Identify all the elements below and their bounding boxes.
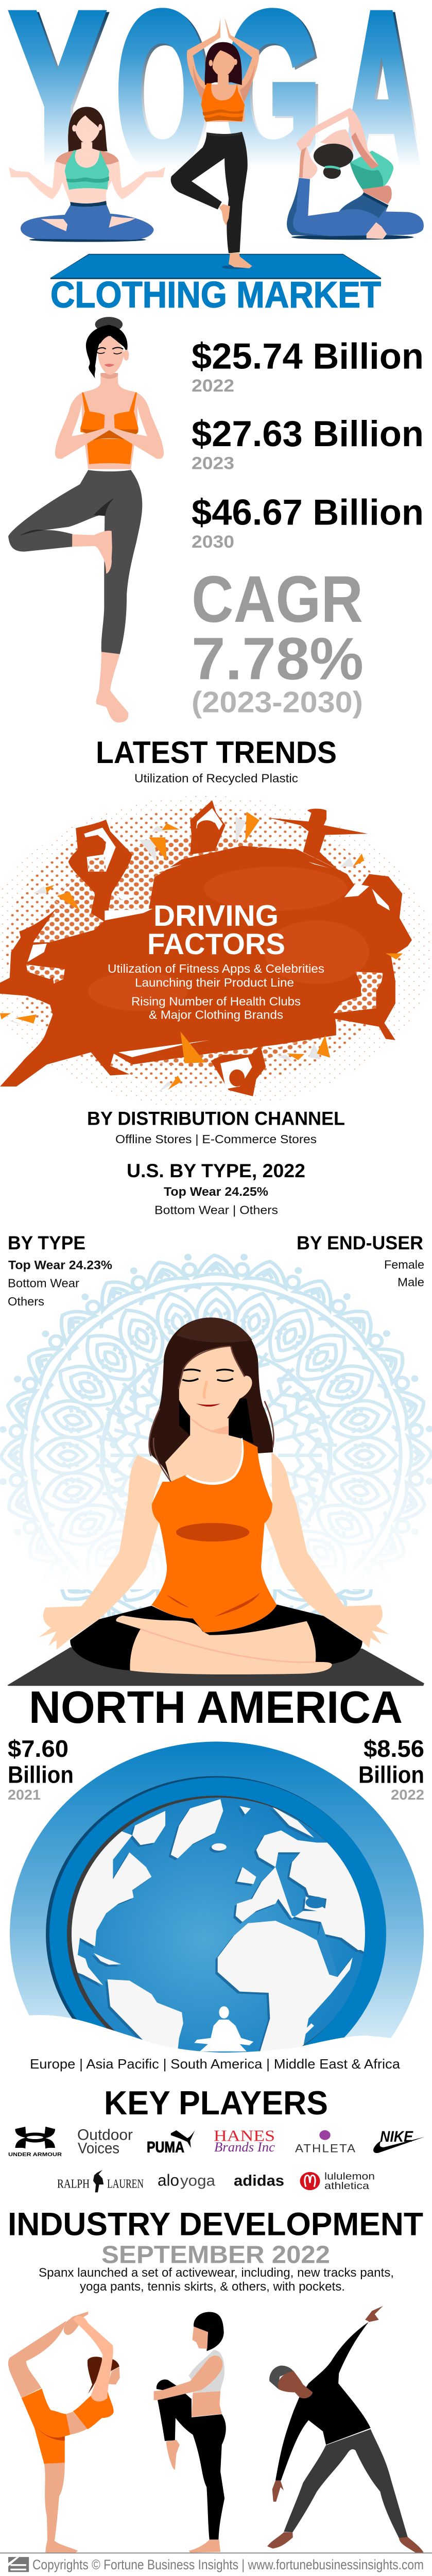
stat: North America 2022: 2022: [391, 1787, 424, 1803]
continents: [72, 1799, 365, 2052]
stat: 2030 market size: [192, 492, 424, 552]
figure: meditating woman on dark mat: [7, 1317, 424, 1686]
title: YOGA: [11, 0, 423, 217]
icon: Fortune Business Insights logo: [8, 2557, 29, 2572]
globe ocean: [67, 1795, 365, 2072]
logo: nike: NIKE: [380, 2128, 413, 2145]
logo: puma: [147, 2130, 195, 2156]
heading: north america: NORTH AMERICA: [29, 1682, 403, 1733]
logo: ralph lauren: LAUREN: [107, 2177, 144, 2191]
logo: lululemon athletica: lululemon: [324, 2171, 375, 2182]
block: by end-user: Female: [384, 1258, 424, 1272]
logo: lululemon athletica: [300, 2171, 375, 2192]
stat: North America 2021: Billion: [8, 1761, 74, 1788]
block: U.S. by type: Bottom Wear | Others: [154, 1204, 278, 1217]
block: by distribution channel: BY DISTRIBUTION CHANNEL: [87, 1108, 345, 1129]
title letters: [11, 0, 421, 215]
stat: North America 2022: $8.56: [364, 1736, 424, 1762]
text: driving factors list: Rising Number of Health Clubs: [131, 995, 301, 1008]
logo: athleta: ATHLETA: [295, 2142, 356, 2155]
logo: under armour: UNDER ARMOUR: [8, 2151, 62, 2158]
heading: driving factors: FACTORS: [147, 927, 285, 960]
logo: under armour: [8, 2127, 62, 2158]
neck and chest: [165, 1413, 242, 1482]
heading: driving factors: [147, 899, 285, 960]
block: by type: Others: [8, 1295, 44, 1309]
crossed leg: [116, 1616, 332, 1674]
block: by end-user: Male: [398, 1276, 424, 1290]
logo: ralph lauren: [57, 2170, 144, 2192]
stat: CAGR: (2023-2030): [192, 686, 363, 719]
logo: alo yoga: yoga: [180, 2172, 216, 2189]
heading: driving factors: DRIVING: [153, 899, 279, 933]
heading: key players: KEY PLAYERS: [104, 2084, 328, 2122]
text: industry development description: Spanx launched a set of activewear, including, new tracks pants,: [39, 2266, 394, 2280]
logo: alo yoga: alo: [158, 2171, 179, 2189]
figure: woman in pigeon pose: [287, 108, 424, 240]
stat: 2023 market size: [192, 413, 424, 473]
stat: CAGR: CAGR: [192, 563, 363, 636]
orange tank top: [151, 1438, 277, 1632]
stat: CAGR: 7.78%: [192, 625, 364, 692]
text: other regions: Europe | Asia Pacific | South America | Middle East & Africa: [30, 2057, 401, 2072]
yoga mat: [50, 254, 381, 279]
block: by type: Top Wear 24.23%: [8, 1258, 112, 1272]
logo: outdoor voices: Voices: [78, 2140, 119, 2157]
stat: 2030 market size: 2030: [192, 532, 234, 552]
subtitle: clothing market: CLOTHING MARKET: [50, 274, 381, 315]
text: latest trend item: Utilization of Recycled Plastic: [134, 772, 298, 785]
logo: hanes brands: Brands Inc: [214, 2140, 275, 2155]
figure heads in cut-outs: [90, 837, 106, 855]
white wave and yoga silhouette: [0, 2006, 432, 2138]
block: U.S. by type: U.S. BY TYPE, 2022: [127, 1160, 305, 1182]
text: driving factors list: [108, 962, 324, 1022]
globe illustration: [10, 1741, 424, 2053]
heading: latest trends: LATEST TRENDS: [96, 735, 337, 770]
stat: 2023 market size: 2023: [192, 453, 234, 473]
panel: driving factors splash illustration: [0, 796, 432, 1109]
logo: adidas: adidas: [234, 2172, 284, 2189]
logo: outdoor voices: [77, 2126, 133, 2157]
logo: puma: PUMA: [147, 2139, 184, 2156]
figure: standing woman in orange top: [171, 18, 260, 269]
heading: date: SEPTEMBER 2022: [101, 2241, 330, 2268]
figure: man side bend: [267, 2306, 424, 2553]
block: by type: Bottom Wear: [8, 1277, 79, 1290]
mandala background: [0, 1249, 432, 1658]
stat: CAGR: [192, 563, 364, 719]
orange and grey triangles: [6, 817, 354, 1092]
figure: woman stretching knee: [154, 2312, 226, 2553]
black hair shadow: [179, 1399, 253, 1443]
stat: North America 2021: [8, 1736, 74, 1803]
block: by distribution channel: [87, 1108, 345, 1146]
title letter shadows: [14, 0, 423, 217]
outer arc: [10, 1741, 424, 2126]
text: driving factors list: & Major Clothing Brands: [149, 1008, 283, 1022]
middle ring: [46, 1776, 386, 2092]
black leggings: [70, 1604, 362, 1670]
arms: [39, 1455, 163, 1650]
block: by type: [8, 1232, 112, 1309]
block: U.S. by type: Top Wear 24.25%: [164, 1185, 268, 1199]
logo: athleta: [295, 2130, 356, 2155]
block: by type: BY TYPE: [8, 1232, 85, 1254]
logo: nike: [373, 2128, 424, 2153]
text: industry development description: [39, 2266, 394, 2294]
text: driving factors list: Utilization of Fitness Apps & Celebrities: [108, 962, 324, 976]
splash body with yoga silhouettes: [0, 800, 412, 1096]
splash lighter blotches: [88, 867, 369, 1011]
face: [179, 1346, 252, 1430]
hair back: [150, 1317, 273, 1484]
mat: [7, 1647, 424, 1686]
footer: [0, 2552, 432, 2572]
stat: 2022 market size: 2022: [192, 376, 234, 396]
logo: alo yoga: [158, 2171, 216, 2189]
block: by end-user: [297, 1232, 424, 1290]
text: industry development description: yoga pants, tennis skirts, & others, with pockets.: [80, 2280, 345, 2294]
logo: hanes brands: HANES: [214, 2127, 275, 2144]
logo: ralph lauren: RALPH: [57, 2177, 90, 2191]
block: by distribution channel: Offline Stores | E-Commerce Stores: [115, 1133, 317, 1146]
block: U.S. by type: [127, 1160, 305, 1217]
stat: 2022 market size: [192, 336, 424, 396]
text: driving factors list: Launching their Product Line: [135, 976, 294, 990]
stat: North America 2021: 2021: [8, 1787, 41, 1803]
figure: dancer pose in orange: [8, 2312, 120, 2553]
figure: woman in tree pose: [8, 317, 164, 722]
figure: seated woman in teal top: [9, 107, 165, 242]
silhouette cut-outs: [26, 808, 390, 1089]
stat: North America 2021: $7.60: [8, 1736, 68, 1762]
logo: hanes brands: [214, 2127, 275, 2155]
logo: lululemon athletica: athletica: [324, 2181, 370, 2192]
logo: outdoor voices: Outdoor: [77, 2126, 133, 2143]
logos: key players: [8, 2126, 424, 2192]
cut-out dots: [26, 857, 383, 1013]
stat: North America 2022: [358, 1736, 424, 1803]
